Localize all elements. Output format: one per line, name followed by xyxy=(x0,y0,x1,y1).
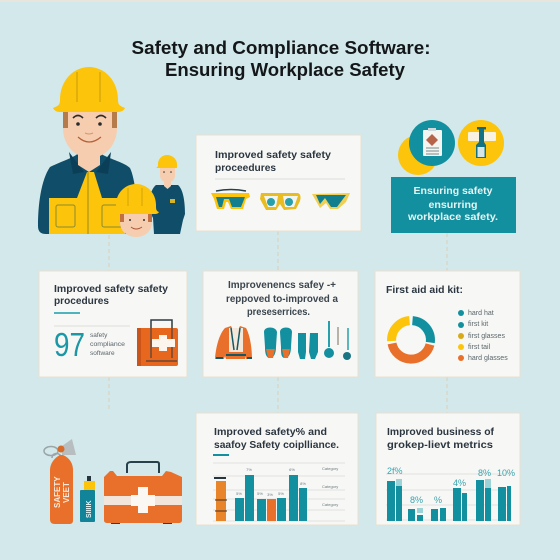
bar chart: Category xyxy=(322,466,338,471)
panel: improved business metrics: grokep-lievt metrics xyxy=(387,439,493,451)
title: Ensuring Workplace Safety xyxy=(165,60,405,80)
bar chart: 5% xyxy=(257,491,263,496)
small labels: safety xyxy=(90,332,108,339)
value labels: 8% xyxy=(478,468,491,478)
icon: spray bottle: SIIIIK xyxy=(86,500,93,518)
bar chart xyxy=(214,466,338,521)
value labels: 8% xyxy=(410,495,423,505)
panel: improved safety bar chart: Improved safety% and xyxy=(214,426,327,438)
bar chart: 3% xyxy=(267,492,273,497)
legend: hard glasses xyxy=(468,355,508,362)
panel: improvements PPE: reppoved to-improved a xyxy=(226,294,338,305)
callout: ensuring safety: Ensuring safety xyxy=(414,185,493,197)
bar chart: Category xyxy=(322,502,338,507)
legend: hard hat xyxy=(468,310,494,317)
icon: tools xyxy=(324,321,351,360)
legend: first glasses xyxy=(468,333,505,340)
callout: ensuring safety: workplace safety. xyxy=(407,211,498,223)
panel: improved procedures goggles xyxy=(196,135,361,231)
bar chart: 7% xyxy=(246,467,252,472)
legend xyxy=(458,310,508,362)
bar chart: 8% xyxy=(300,481,306,486)
value labels: 4% xyxy=(453,478,466,488)
legend: first tail xyxy=(468,344,491,351)
icon: safety jacket xyxy=(215,326,252,359)
legend: first kit xyxy=(468,321,488,328)
value labels: % xyxy=(434,495,442,505)
callout: ensuring safety: ensurring xyxy=(428,199,478,211)
panel: improvements PPE xyxy=(203,271,358,377)
grouped bar chart xyxy=(387,479,511,521)
heading: procedures xyxy=(54,296,109,307)
value labels: 10% xyxy=(497,468,515,478)
bar chart: Category xyxy=(322,484,338,489)
small labels: compliance xyxy=(90,341,125,348)
heading xyxy=(215,149,331,174)
value labels xyxy=(387,466,515,505)
panel: improved safety bar chart: saafoy Safety coiplliance. xyxy=(214,439,339,451)
bar chart: 5% xyxy=(278,491,284,496)
illustration: workers xyxy=(38,67,185,237)
title: Safety and Compliance Software: xyxy=(132,38,430,58)
icon: fire extinguisher: SAFETY xyxy=(53,476,62,508)
large worker xyxy=(38,67,138,234)
icons: document and bottle xyxy=(398,120,504,175)
small labels xyxy=(90,332,125,357)
small labels: software xyxy=(90,350,115,357)
icon: first aid bag xyxy=(137,320,178,366)
panel: improved safety bar chart xyxy=(196,413,358,525)
icon: fire extinguisher: VEET xyxy=(62,482,71,503)
donut chart xyxy=(392,321,430,359)
heading: Improved safety safety xyxy=(215,149,331,161)
icon: gloves xyxy=(264,328,292,358)
small worker xyxy=(149,155,185,234)
panel: improvements PPE: Improvenencs safey -+ xyxy=(228,280,336,291)
panel: first aid donut: First aid aid kit: xyxy=(386,284,463,296)
heading: Improved safety safety xyxy=(54,284,168,295)
illustration: extinguisher, bottle and first aid kit xyxy=(44,439,182,524)
heading xyxy=(54,284,168,307)
panel: improved business metrics: Improved business of xyxy=(387,426,494,438)
heading: proceedures xyxy=(215,162,276,174)
value labels: 2f% xyxy=(387,466,403,476)
big number: 97 xyxy=(54,326,85,363)
icon: goggles xyxy=(211,190,350,210)
panel: improved business metrics xyxy=(376,413,520,525)
panel: improvements PPE: preseserrices. xyxy=(247,307,310,318)
child worker xyxy=(113,184,159,237)
panel: first aid donut xyxy=(375,271,520,377)
callout: ensuring safety xyxy=(391,177,516,233)
bar chart: 6% xyxy=(289,467,295,472)
icon: first aid kit xyxy=(104,462,182,524)
panel: improved procedures first aid xyxy=(39,271,187,377)
bar chart: 5% xyxy=(236,491,242,496)
icon: boots xyxy=(298,333,318,359)
title xyxy=(132,38,430,80)
icon: fire extinguisher xyxy=(44,439,76,524)
